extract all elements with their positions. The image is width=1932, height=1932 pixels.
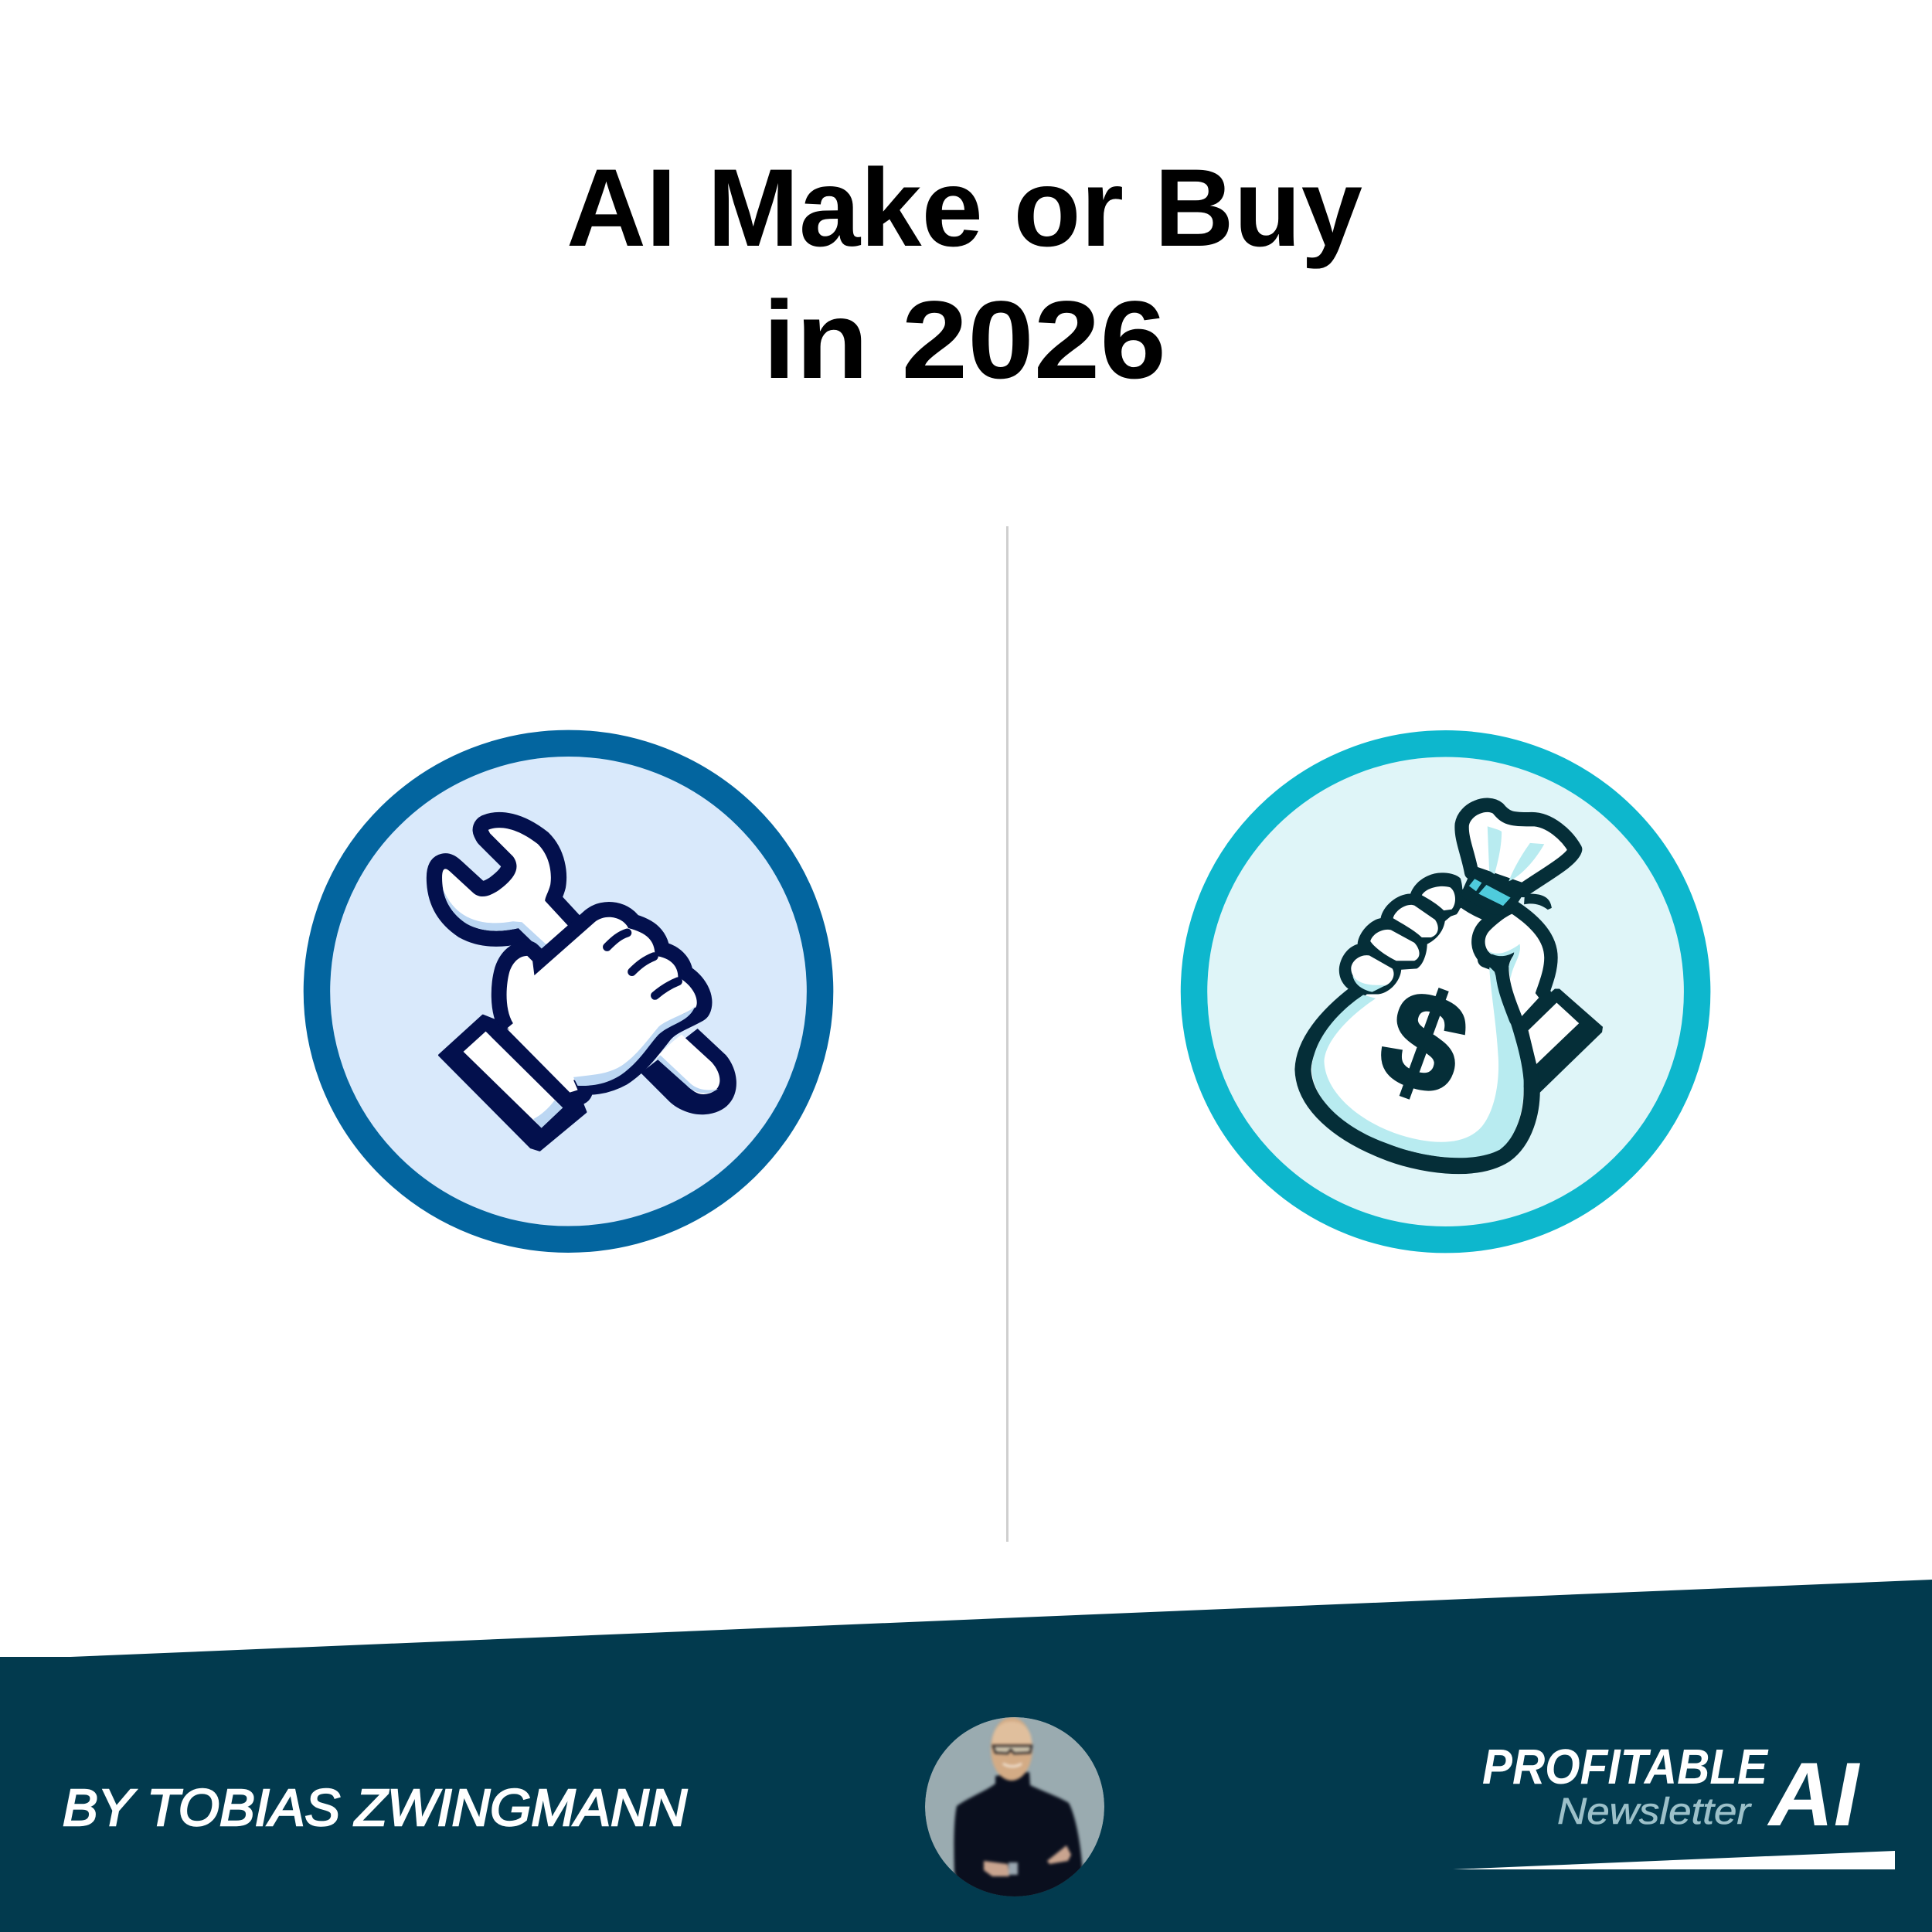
badge circle [317,743,820,1240]
title: AI Make or Buy [566,147,1362,270]
newsletter logo: Newsletter [1557,1791,1752,1832]
bag body: $ [1362,958,1486,1127]
title: in 2026 [763,279,1166,402]
newsletter logo [1453,1739,1895,1869]
author byline: BY TOBIAS ZWINGMANN [63,1779,688,1837]
sleeve [1521,989,1603,1094]
bag tie [1460,870,1552,915]
bag body [1303,897,1532,1166]
icon: make, hand holding wrench [317,743,820,1240]
newsletter logo: PROFITABLE [1482,1739,1769,1794]
fist [507,917,697,1093]
fingers [1339,872,1463,994]
footer band [0,1580,1932,1932]
newsletter logo: AI [1767,1743,1860,1845]
icon: buy, hand holding money bag [1194,743,1697,1240]
bag ruffle [1462,805,1575,890]
shirt cuff [439,1015,586,1150]
badge circle [1194,743,1697,1240]
author portrait [925,1717,1104,1903]
wrench head [442,828,568,952]
hand back and thumb [1485,914,1544,1016]
title [566,147,1362,402]
wrench lower handle [641,1029,736,1114]
